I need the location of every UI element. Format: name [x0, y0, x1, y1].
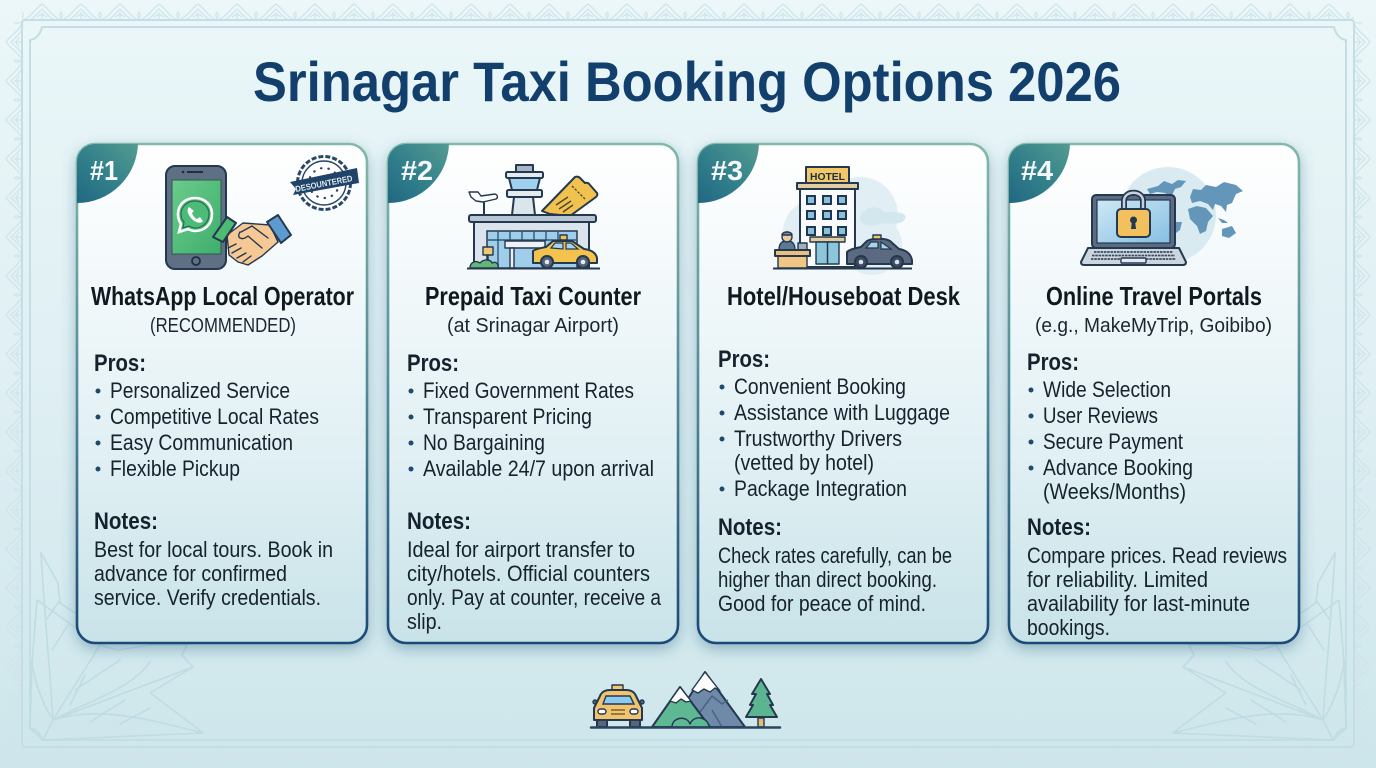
panel: Prepaid Taxi Counter: [378, 139, 688, 658]
pros list: [407, 350, 654, 481]
heading: Online Travel Portals: [1046, 281, 1262, 311]
notes: Check rates carefully, can be: [718, 543, 952, 568]
pros list: (Weeks/Months): [1043, 479, 1186, 504]
icon: stamp badge: DESOUNTERED: [294, 173, 353, 194]
ground line: [591, 726, 780, 729]
pros list: Trustworthy Drivers: [734, 426, 902, 451]
icon: taxi, mountains and pine tree: [591, 672, 780, 728]
notes: Compare prices. Read reviews: [1027, 543, 1287, 568]
pros list: Pros:: [1027, 349, 1079, 376]
card background: [77, 144, 367, 643]
decorative maple leaf: bottom left: [30, 553, 203, 740]
notes: Notes:: [94, 508, 158, 535]
icon: hotel with reception desk and car: [773, 167, 912, 275]
card background: [388, 144, 678, 643]
mountains: [652, 672, 745, 727]
notes: advance for confirmed: [94, 561, 287, 586]
notes: availability for last-minute: [1027, 591, 1250, 616]
notes: bookings.: [1027, 615, 1110, 640]
rank badge #3: [698, 144, 759, 203]
pros list: Convenient Booking: [734, 374, 906, 399]
pros list: [1027, 349, 1193, 504]
notes: Ideal for airport transfer to: [407, 537, 635, 562]
pros list: Wide Selection: [1043, 377, 1171, 402]
pros list: [94, 350, 319, 481]
notes: for reliability. Limited: [1027, 567, 1208, 592]
pros list: User Reviews: [1043, 403, 1158, 428]
subtitle: (at Srinagar Airport): [447, 315, 619, 337]
pros list: Package Integration: [734, 476, 907, 501]
pros list: Fixed Government Rates: [423, 378, 634, 403]
notes: only. Pay at counter, receive a: [407, 585, 662, 610]
icon: hotel with reception desk and car: HOTEL: [810, 171, 846, 183]
pros list: Available 24/7 upon arrival: [423, 456, 654, 481]
card background: [698, 144, 988, 643]
pros list: Secure Payment: [1043, 429, 1183, 454]
panel: WhatsApp Local Operator: [67, 139, 377, 658]
notes: [407, 508, 662, 634]
pros list: Pros:: [94, 350, 146, 377]
notes: Notes:: [407, 508, 471, 535]
subtitle: (e.g., MakeMyTrip, Goibibo): [1035, 315, 1272, 337]
card background: [1009, 144, 1299, 643]
heading: Prepaid Taxi Counter: [425, 281, 641, 311]
notes: [1027, 514, 1287, 640]
title: Srinagar Taxi Booking Options 2026: [253, 50, 1121, 113]
pros list: Competitive Local Rates: [110, 404, 319, 429]
notes: higher than direct booking.: [718, 567, 937, 592]
taxi: [593, 685, 644, 727]
pros list: Easy Communication: [110, 430, 293, 455]
rank badge #1: #1: [90, 155, 118, 186]
pros list: [718, 346, 950, 501]
notes: Notes:: [1027, 514, 1091, 541]
rank badge #2: #2: [401, 155, 433, 186]
icon: laptop with padlock and world map: [1081, 167, 1243, 265]
pros list: Transparent Pricing: [423, 404, 592, 429]
notes: [94, 508, 333, 610]
pros list: (vetted by hotel): [734, 450, 874, 475]
icon: stamp badge: [290, 156, 359, 210]
pine tree: [746, 679, 777, 727]
rank badge #3: #3: [711, 155, 743, 186]
rank badge #4: #4: [1021, 155, 1053, 186]
heading: Hotel/Houseboat Desk: [727, 281, 960, 311]
notes: service. Verify credentials.: [94, 585, 321, 610]
rank badge #4: [1009, 144, 1070, 203]
icon: airport terminal with ticket and taxi: [467, 165, 600, 268]
decorative maple leaf: bottom right: [1173, 553, 1346, 740]
pros list: Pros:: [407, 350, 459, 377]
subtitle: (RECOMMENDED): [150, 315, 296, 337]
notes: [718, 514, 952, 616]
panel: Online Travel Portals: [999, 139, 1309, 658]
pros list: Pros:: [718, 346, 770, 373]
pros list: Flexible Pickup: [110, 456, 240, 481]
pros list: Personalized Service: [110, 378, 290, 403]
notes: Notes:: [718, 514, 782, 541]
notes: city/hotels. Official counters: [407, 561, 650, 586]
rank badge #2: [388, 144, 449, 203]
rank badge #1: [77, 144, 138, 203]
pros list: Assistance with Luggage: [734, 400, 950, 425]
panel: Hotel/Houseboat Desk: [688, 139, 998, 658]
notes: slip.: [407, 609, 442, 634]
notes: Good for peace of mind.: [718, 591, 926, 616]
notes: Best for local tours. Book in: [94, 537, 333, 562]
heading: WhatsApp Local Operator: [91, 281, 354, 311]
pros list: No Bargaining: [423, 430, 545, 455]
pros list: Advance Booking: [1043, 455, 1193, 480]
icon: phone with WhatsApp and handshake: [166, 166, 291, 269]
